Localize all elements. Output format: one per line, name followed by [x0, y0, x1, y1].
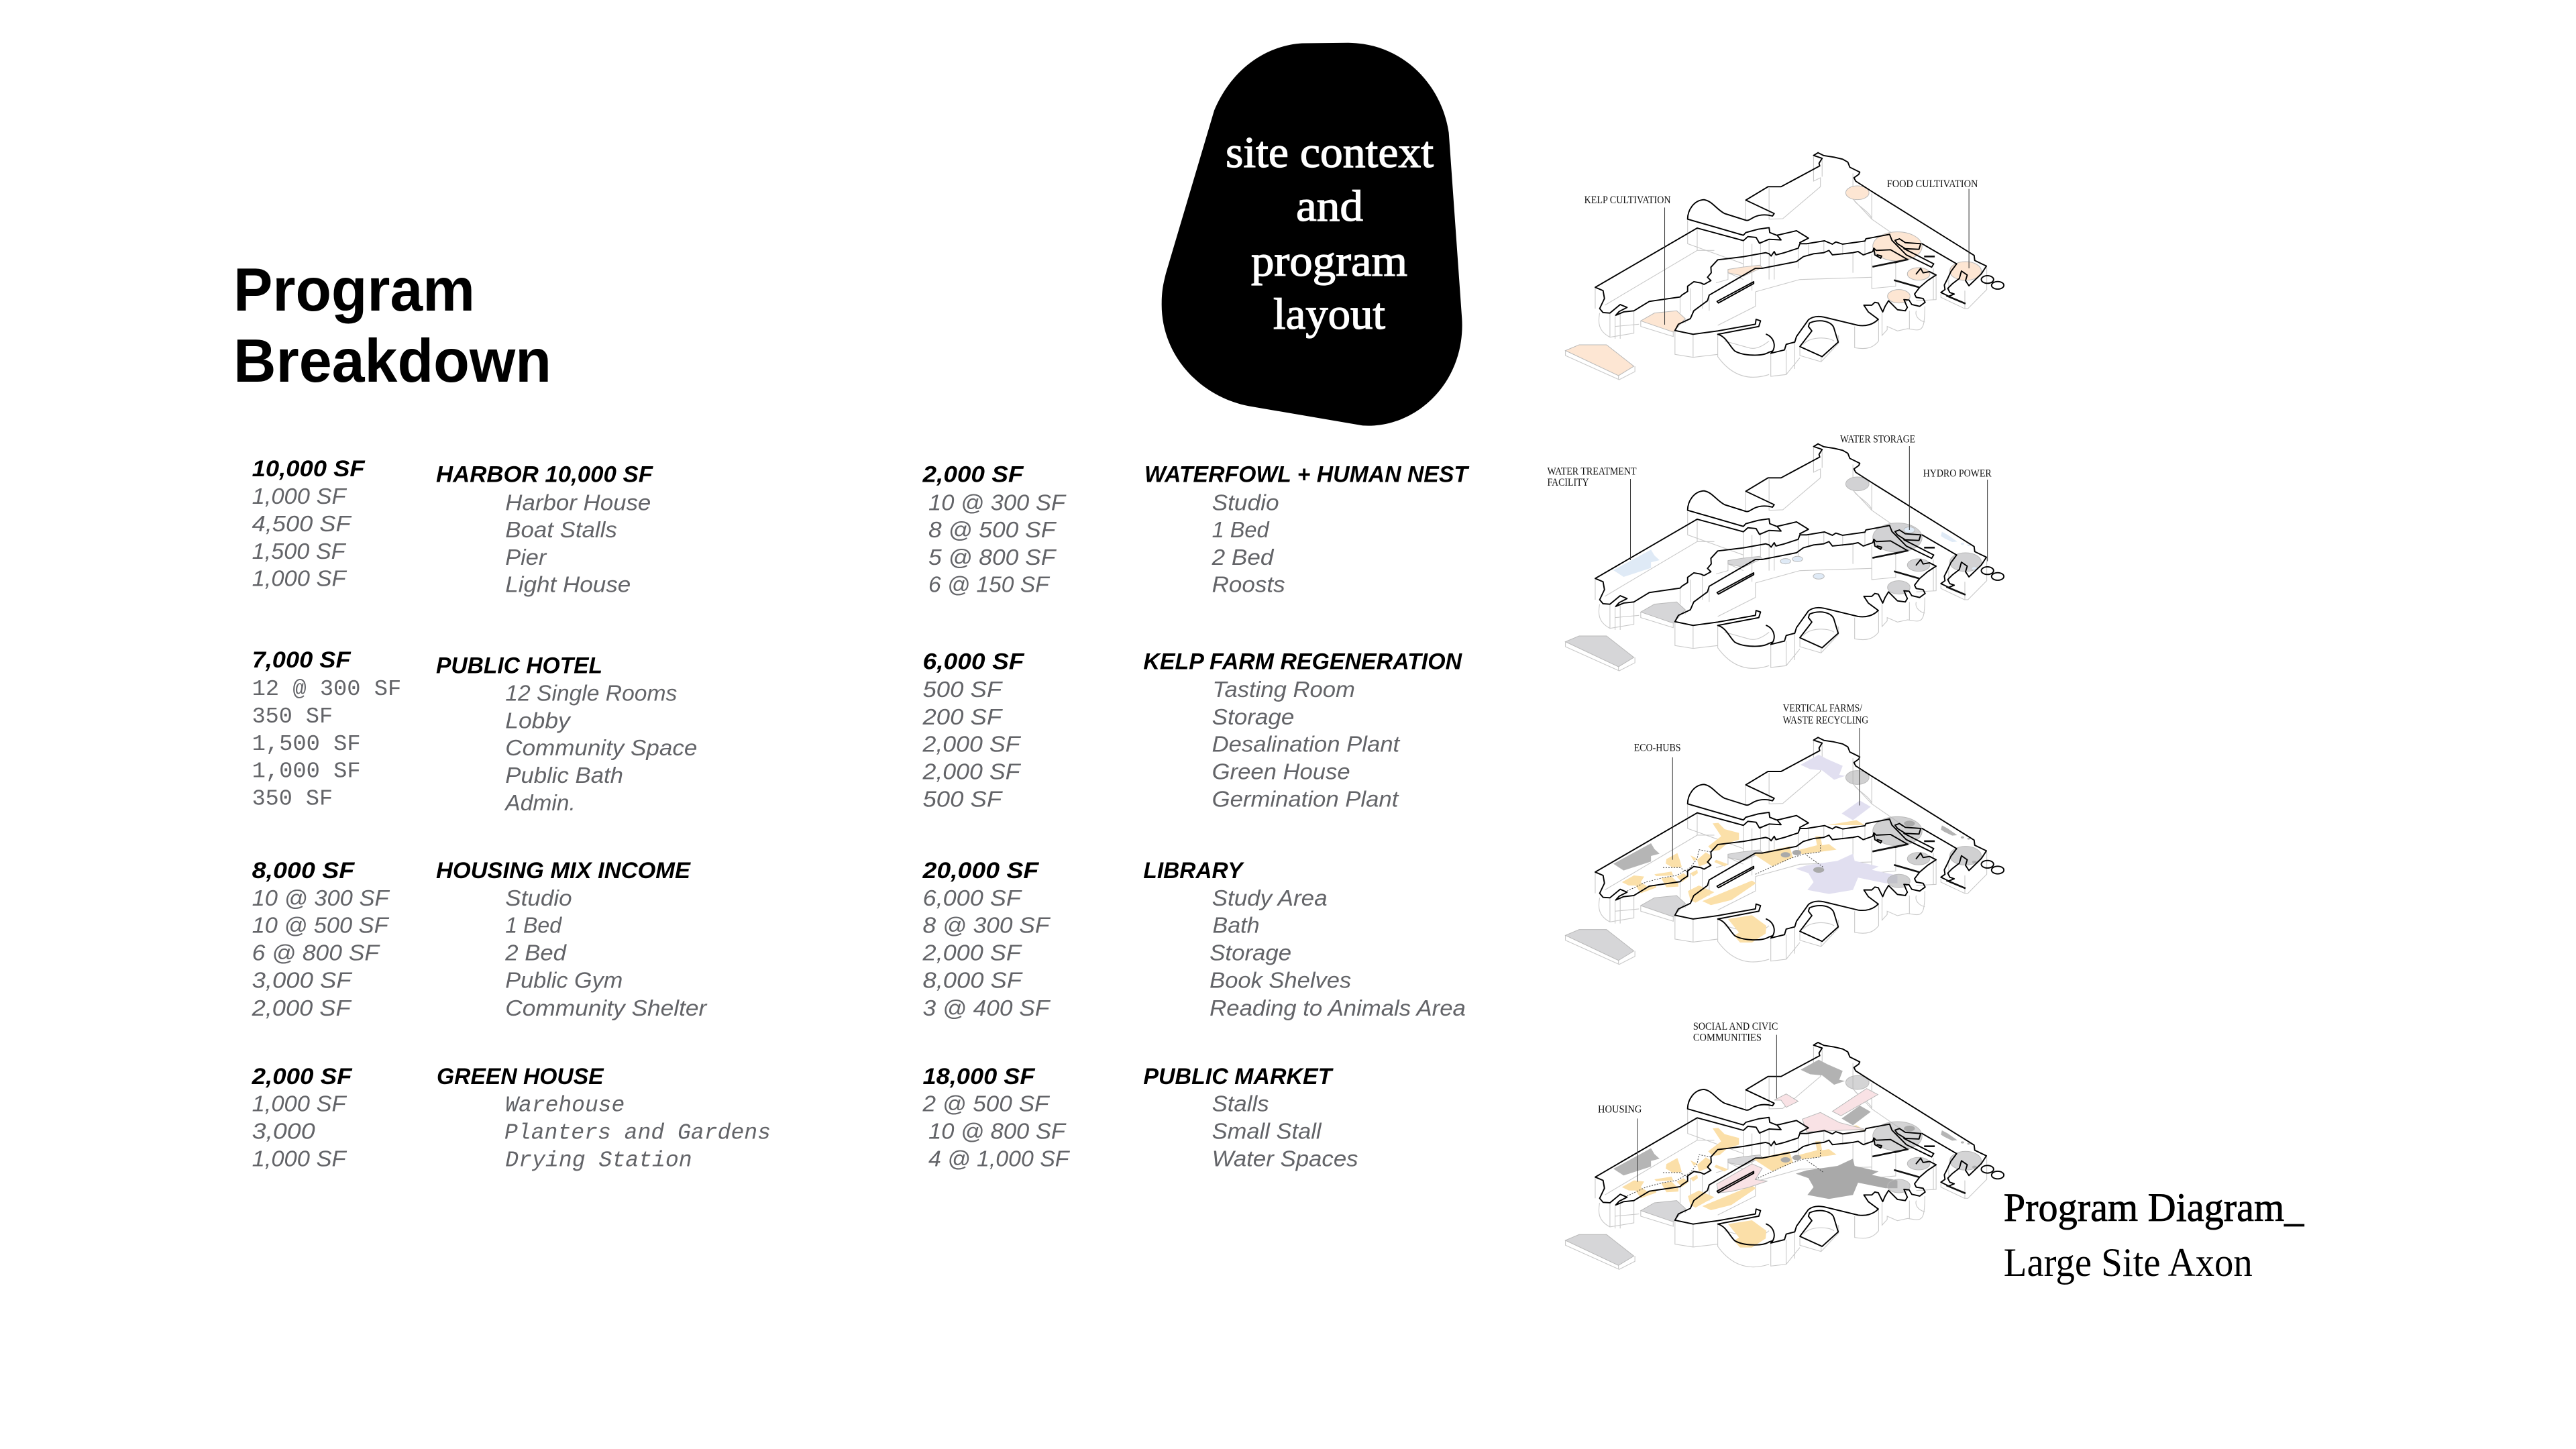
axon diagram 3: eco-hubs and vertical farms: ECO-HUBS	[1634, 742, 1681, 753]
program: library: 8 @ 300 SF	[923, 913, 1051, 938]
program: library: Book Shelves	[1210, 968, 1351, 993]
program: waterfowl and human nest	[922, 462, 1470, 597]
axon diagram 1: food and kelp cultivation: KELP CULTIVATION	[1585, 195, 1671, 206]
caption: Large Site Axon	[2004, 1240, 2253, 1285]
program: library: 2,000 SF	[922, 941, 1022, 965]
program: public hotel: 350 SF	[252, 787, 333, 812]
program: public hotel: 1,500 SF	[252, 732, 361, 757]
program: waterfowl and human nest: Roosts	[1212, 572, 1285, 597]
program: housing mix income: 8,000 SF	[252, 858, 356, 883]
program: public hotel: PUBLIC HOTEL	[436, 653, 602, 678]
caption: Program Diagram_	[2004, 1185, 2304, 1230]
program: kelp farm regeneration: 6,000 SF	[923, 649, 1025, 675]
program: housing mix income: Community Shelter	[505, 996, 708, 1020]
program: kelp farm regeneration: 2,000 SF	[922, 759, 1021, 784]
program: kelp farm regeneration: Tasting Room	[1213, 677, 1355, 702]
axon diagram 4: housing and social communities: COMMUNITIES	[1693, 1032, 1762, 1044]
program: harbor: 1,500 SF	[252, 539, 347, 564]
program: kelp farm regeneration: Germination Plant	[1212, 786, 1399, 811]
program: public hotel: 350 SF	[252, 704, 333, 729]
program: harbor: 10,000 SF	[252, 456, 366, 482]
program: public market: 4 @ 1,000 SF	[928, 1146, 1070, 1171]
program: green house: 2,000 SF	[252, 1064, 353, 1089]
program: library: 3 @ 400 SF	[923, 996, 1051, 1020]
axon diagram 1: food and kelp cultivation: FOOD CULTIVATION	[1887, 178, 1978, 190]
program: kelp farm regeneration: 500 SF	[923, 677, 1003, 702]
program: waterfowl and human nest: 2 Bed	[1212, 545, 1275, 570]
callout: black blob	[1162, 43, 1462, 426]
title	[233, 256, 551, 395]
program: waterfowl and human nest: 5 @ 800 SF	[928, 545, 1057, 570]
axon diagram 3: eco-hubs and vertical farms: WASTE RECYCLING	[1783, 714, 1868, 726]
program: harbor	[252, 456, 653, 597]
program: housing mix income: 6 @ 800 SF	[252, 941, 380, 965]
program: public market: PUBLIC MARKET	[1143, 1064, 1334, 1089]
program: green house: Warehouse	[505, 1093, 625, 1118]
program: harbor: 4,500 SF	[252, 511, 352, 536]
axon diagram 2: water systems: FACILITY	[1547, 477, 1589, 488]
program: housing mix income: 10 @ 300 SF	[252, 885, 390, 910]
program: green house: 1,000 SF	[252, 1146, 347, 1171]
program: public hotel: 1,000 SF	[252, 759, 361, 784]
program: public hotel: Community Space	[505, 735, 697, 760]
program: housing mix income: 3,000 SF	[252, 968, 353, 993]
program: waterfowl and human nest: 1 Bed	[1212, 517, 1270, 542]
axon diagram 1: food and kelp cultivation	[1566, 153, 2004, 380]
program: housing mix income: Studio	[505, 885, 572, 910]
program: harbor: Light House	[505, 572, 631, 597]
program: public hotel: Admin.	[504, 790, 576, 815]
program: kelp farm regeneration: Storage	[1212, 704, 1294, 729]
program: kelp farm regeneration: KELP FARM REGENERATION	[1143, 649, 1463, 675]
program: library: 8,000 SF	[923, 968, 1023, 993]
axon diagram 4: housing and social communities: HOUSING	[1598, 1104, 1642, 1115]
program: public market	[922, 1064, 1358, 1171]
program: kelp farm regeneration: 2,000 SF	[922, 731, 1021, 756]
program: public market: Stalls	[1212, 1091, 1269, 1116]
program: harbor: Pier	[505, 545, 547, 570]
program: waterfowl and human nest: 6 @ 150 SF	[928, 572, 1051, 597]
axon diagram 2: water systems: WATER TREATMENT	[1547, 466, 1637, 477]
program: harbor: 1,000 SF	[252, 566, 347, 590]
program: harbor: Harbor House	[505, 490, 651, 515]
program: green house	[252, 1064, 771, 1173]
axon diagram 3: eco-hubs and vertical farms	[1566, 703, 2004, 965]
program: housing mix income: 1 Bed	[505, 913, 563, 938]
program: green house: Planters and Gardens	[504, 1121, 771, 1146]
program: kelp farm regeneration: 200 SF	[922, 704, 1003, 729]
program: public hotel: Lobby	[505, 708, 572, 733]
caption	[2004, 1185, 2304, 1285]
program: housing mix income: 2,000 SF	[252, 996, 352, 1020]
program: waterfowl and human nest: Studio	[1212, 490, 1279, 515]
callout: black blob: layout	[1273, 290, 1385, 339]
program: library: 20,000 SF	[922, 858, 1040, 883]
program: waterfowl and human nest: WATERFOWL + HUMAN NEST	[1144, 462, 1470, 488]
program: harbor: 1,000 SF	[252, 484, 347, 508]
program: green house: Drying Station	[505, 1148, 692, 1173]
program: housing mix income: Public Gym	[505, 968, 623, 993]
program: public hotel: 7,000 SF	[252, 647, 352, 673]
program: library: Study Area	[1212, 885, 1328, 910]
program: waterfowl and human nest: 10 @ 300 SF	[928, 490, 1067, 515]
program: public hotel: 12 Single Rooms	[505, 681, 677, 706]
axon diagram 4: housing and social communities	[1566, 1021, 2004, 1269]
axon diagram 4: housing and social communities: SOCIAL AND CIVIC	[1693, 1021, 1778, 1032]
program: kelp farm regeneration: Desalination Plant	[1212, 731, 1401, 756]
axon diagram 2: water systems	[1547, 433, 2004, 671]
program: green house: GREEN HOUSE	[437, 1064, 604, 1089]
program: harbor: HARBOR 10,000 SF	[436, 462, 653, 488]
title: Breakdown	[233, 327, 551, 395]
title: Program	[233, 256, 475, 324]
program: public market: Water Spaces	[1212, 1146, 1358, 1171]
program: green house: 1,000 SF	[252, 1091, 347, 1116]
program: library: 6,000 SF	[923, 885, 1022, 910]
program: library: LIBRARY	[1143, 858, 1245, 883]
axon diagram 3: eco-hubs and vertical farms: VERTICAL FARMS/	[1783, 703, 1863, 714]
program: housing mix income: 2 Bed	[504, 941, 568, 965]
program: waterfowl and human nest: 2,000 SF	[922, 462, 1024, 488]
callout: black blob: and	[1296, 182, 1363, 231]
callout: black blob: program	[1251, 237, 1407, 286]
program: library	[922, 858, 1466, 1020]
program: green house: 3,000	[252, 1119, 315, 1144]
program: harbor: Boat Stalls	[505, 517, 617, 542]
program: waterfowl and human nest: 8 @ 500 SF	[928, 517, 1057, 542]
program: public market: Small Stall	[1212, 1119, 1322, 1144]
program: library: Storage	[1210, 941, 1291, 965]
program: public hotel: Public Bath	[505, 763, 623, 788]
axon diagram 2: water systems: WATER STORAGE	[1840, 433, 1915, 445]
program: housing mix income: HOUSING MIX INCOME	[436, 858, 691, 883]
program: library: Bath	[1213, 913, 1260, 938]
program: public market: 2 @ 500 SF	[922, 1091, 1050, 1116]
program: library: Reading to Animals Area	[1210, 996, 1466, 1020]
program: public hotel: 12 @ 300 SF	[252, 677, 401, 702]
program: public market: 18,000 SF	[923, 1064, 1036, 1089]
program: kelp farm regeneration	[922, 649, 1463, 811]
program: public market: 10 @ 800 SF	[928, 1119, 1067, 1144]
program: housing mix income	[252, 858, 708, 1020]
axon diagram 2: water systems: HYDRO POWER	[1923, 468, 1992, 480]
program: kelp farm regeneration: 500 SF	[923, 786, 1003, 811]
program: housing mix income: 10 @ 500 SF	[252, 913, 390, 938]
program: kelp farm regeneration: Green House	[1212, 759, 1350, 784]
program: public hotel	[252, 647, 697, 815]
callout: black blob: site context	[1226, 128, 1434, 177]
